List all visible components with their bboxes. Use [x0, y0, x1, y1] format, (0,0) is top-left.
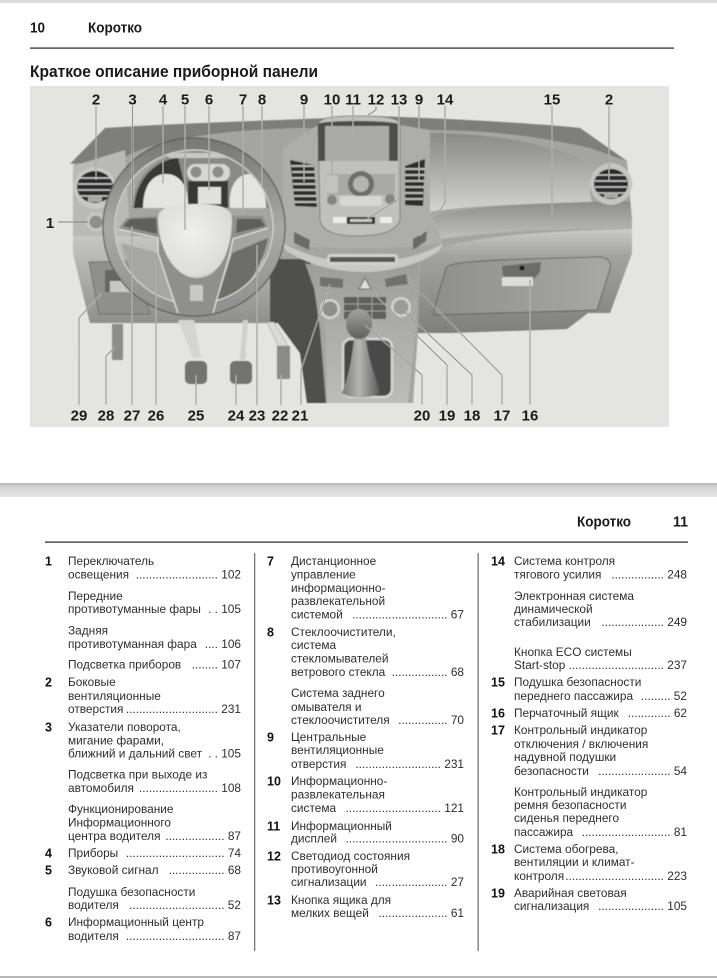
center stack surround — [283, 125, 443, 248]
text column 1 — [45, 554, 241, 943]
item 14 — [491, 554, 687, 672]
left upper dash — [73, 150, 130, 236]
small gauges — [187, 164, 230, 208]
item 13: 13 — [267, 894, 281, 908]
item 12: Светодиод состояния — [291, 849, 410, 863]
item 12: противоугонной — [291, 862, 378, 876]
item 1: Задняя — [68, 624, 108, 638]
item 12: сигнализации — [291, 875, 367, 889]
item 7: ............................. 67 — [352, 608, 464, 622]
item 3: автомобиля — [68, 781, 134, 795]
callout numbers bottom row: 16 — [522, 408, 538, 424]
item 2: отверстия — [68, 702, 123, 716]
item 10 — [267, 774, 464, 815]
callout numbers top row: 9 — [415, 92, 423, 108]
item 16: ............. 62 — [628, 706, 687, 720]
item 8: ветрового стекла — [291, 665, 386, 679]
item 7: Дистанционное — [291, 554, 377, 568]
item 12: ...................... 27 — [375, 875, 464, 889]
text column 2 — [267, 554, 464, 920]
item 16 — [491, 706, 687, 720]
knee panel — [89, 261, 150, 314]
radio controls — [327, 171, 395, 224]
item 10: развлекательная — [291, 788, 385, 802]
item 2: Боковые — [68, 675, 116, 689]
item 3: 3 — [45, 720, 52, 734]
item 5: ............................. 52 — [129, 898, 241, 912]
item 17: ........................... 81 — [582, 825, 687, 839]
item 4: Приборы — [68, 846, 118, 860]
item 9: вентиляционные — [291, 743, 384, 757]
item 14: 14 — [491, 554, 505, 568]
callout numbers top row: 7 — [239, 92, 247, 108]
item 1: ........ 107 — [192, 658, 241, 672]
right air vent — [590, 163, 632, 205]
left spoke controls — [123, 218, 157, 234]
driver side dark footwell — [270, 259, 326, 403]
callout numbers bottom row: 21 — [292, 408, 308, 424]
item 3: мигание фарами, — [68, 734, 164, 748]
callout numbers bottom row: 20 — [414, 408, 430, 424]
callout numbers top row: 14 — [437, 92, 454, 108]
item 12: 12 — [267, 850, 281, 864]
callout numbers bottom row: 25 — [188, 408, 204, 424]
item 19: Аварийная световая — [514, 886, 627, 900]
item 8: Стеклоочистители, — [291, 625, 396, 639]
item 9: 9 — [267, 730, 274, 744]
item 14: ................ 248 — [611, 568, 687, 582]
page header right: Коротко — [577, 514, 631, 530]
item 15: 15 — [491, 676, 505, 690]
left lower dash — [73, 236, 280, 323]
item 6: водителя — [68, 929, 119, 943]
text column 3 — [491, 554, 687, 913]
item 11: 11 — [267, 820, 280, 834]
gear boot — [342, 338, 380, 398]
item 18 — [491, 842, 687, 883]
console buttons — [320, 274, 408, 289]
item 1: противотуманная фара — [68, 637, 197, 651]
item 8: ............... 70 — [398, 713, 464, 727]
item 5: Звуковой сигнал — [68, 863, 159, 877]
item 7: развлекательной — [291, 594, 385, 608]
page break band — [0, 483, 717, 497]
item 6 — [45, 915, 241, 943]
item 6: 6 — [45, 916, 52, 930]
steering wheel ring — [109, 144, 279, 310]
item 1: ......................... 102 — [136, 568, 241, 582]
right middle dash strip — [420, 201, 632, 243]
callout numbers bottom row: 28 — [98, 408, 114, 424]
callout numbers top row: 13 — [391, 92, 407, 108]
parking lever — [112, 324, 123, 360]
item 3: Подсветка при выходе из — [68, 768, 207, 782]
callout leader halo — [79, 108, 609, 405]
item 9 — [267, 730, 464, 771]
item 3: Информационного — [68, 816, 171, 830]
item 1: освещения — [68, 568, 129, 582]
item 7: управление — [291, 568, 356, 582]
item 17: надувной подушки — [514, 750, 616, 764]
item 3: ближний и дальний свет — [68, 746, 203, 760]
callout numbers top row: 11 — [345, 92, 361, 108]
cluster dark shadow — [134, 158, 190, 208]
steering wheel spokes — [118, 216, 268, 313]
steering wheel ring outline — [109, 144, 279, 310]
callout numbers top row: 9 — [300, 92, 308, 108]
callout numbers bottom row: 18 — [464, 408, 480, 424]
callout numbers bottom row: 27 — [124, 408, 140, 424]
center console — [305, 256, 418, 403]
item 1: Передние — [68, 589, 123, 603]
item 2: вентиляционные — [68, 689, 161, 703]
lower center trim — [283, 243, 443, 272]
bottom page edge line — [0, 976, 717, 978]
item 5: Подушка безопасности — [68, 885, 195, 899]
item 3: Указатели поворота, — [68, 720, 181, 734]
item 12 — [267, 849, 464, 889]
item 10: ............................. 121 — [346, 801, 464, 815]
item 17: отключения / включения — [514, 737, 648, 751]
page header left — [30, 20, 674, 49]
callout numbers bottom row: 24 — [228, 408, 245, 424]
left gauge — [143, 174, 188, 208]
item 11: Информационный — [291, 819, 392, 833]
driver information display — [198, 187, 221, 204]
item 17 — [491, 723, 687, 839]
item 14: Кнопка ECO системы — [514, 645, 632, 659]
column dividers — [254, 553, 479, 951]
item 19: 19 — [491, 886, 505, 900]
item 8: стекломывателей — [291, 652, 388, 666]
item 3 — [45, 720, 241, 843]
horn pad — [158, 204, 232, 278]
item 2: 2 — [45, 676, 52, 690]
item 8: омывателя и — [291, 700, 361, 714]
steering wheel ring highlight — [115, 150, 273, 304]
panel: dashboard illustration — [30, 86, 669, 427]
item 10: 10 — [267, 774, 281, 788]
center vent left — [290, 160, 317, 207]
light switch — [86, 212, 106, 232]
item 16: 16 — [491, 706, 505, 720]
callout numbers top row: 5 — [181, 92, 189, 108]
item 7 — [267, 554, 464, 622]
item 7: информационно- — [291, 581, 385, 595]
callout numbers top row: 4 — [159, 92, 168, 108]
item 13: ..................... 61 — [378, 906, 464, 920]
screen bezel — [318, 121, 398, 161]
center stack — [318, 116, 400, 236]
item 1: Подсветка приборов — [68, 658, 181, 672]
item 15 — [491, 675, 687, 703]
callout numbers bottom row: 17 — [494, 408, 510, 424]
item 13 — [267, 893, 464, 920]
item 17: Контрольный индикатор — [514, 785, 648, 799]
callout numbers top row: 12 — [368, 92, 384, 108]
callout numbers bottom row: 22 — [272, 408, 288, 424]
callout numbers top row: 3 — [128, 92, 137, 108]
item 19 — [491, 886, 687, 913]
item 14: тягового усилия — [514, 568, 601, 582]
callout numbers top row: 1 — [46, 215, 54, 232]
item 17: 17 — [491, 724, 505, 738]
right glove section — [418, 229, 632, 333]
callout numbers top row: 8 — [258, 92, 266, 108]
callout numbers top row: 10 — [324, 92, 340, 108]
center vent right — [405, 159, 425, 206]
item 9: .......................... 231 — [355, 757, 464, 771]
item 1 — [45, 554, 241, 672]
gear boot surround — [343, 339, 392, 397]
lower spoke badge — [190, 285, 203, 301]
item 14: стабилизации — [514, 615, 591, 629]
right gauge — [230, 174, 266, 208]
item 14: Система контроля — [514, 554, 615, 568]
item 10: Информационно- — [291, 774, 387, 788]
item 17: ремня безопасности — [514, 798, 626, 812]
spoke piping — [118, 228, 268, 313]
accelerator pedal — [267, 322, 290, 379]
storage slot — [327, 254, 398, 265]
right spoke controls — [236, 219, 265, 233]
item 1: Переключатель — [68, 554, 154, 568]
callout numbers top row — [46, 92, 613, 232]
item 3: центра водителя — [68, 829, 160, 843]
item 18: 18 — [491, 842, 505, 856]
item 17: пассажира — [514, 825, 574, 839]
page header right — [45, 514, 688, 543]
visor bar — [168, 153, 230, 158]
item 15: переднего пассажира — [514, 689, 633, 703]
item 5: ................. 68 — [169, 863, 241, 877]
glove box handle — [502, 262, 541, 286]
item 8 — [267, 625, 464, 727]
item 8: стеклоочистителя — [291, 713, 390, 727]
item 3: ........................ 108 — [139, 781, 241, 795]
item 9: Центральные — [291, 730, 367, 744]
page header left: Коротко — [88, 20, 142, 36]
inside wheel right lower area — [213, 238, 268, 313]
item 14: ................... 249 — [601, 615, 687, 629]
item 9: отверстия — [291, 757, 346, 771]
item 17: ...................... 54 — [598, 764, 687, 778]
instrument cluster backing — [132, 151, 270, 208]
item 7: системой — [291, 608, 343, 622]
callout numbers bottom row: 26 — [148, 408, 164, 424]
item 14: ............................. 237 — [569, 658, 687, 672]
item 10: система — [291, 801, 336, 815]
callout numbers top row: 6 — [205, 92, 213, 108]
item 1: противотуманные фары — [68, 602, 201, 616]
clutch pedal — [178, 320, 207, 384]
item 18: вентиляции и климат- — [514, 855, 635, 869]
item 4 — [45, 846, 241, 860]
gear knob — [346, 309, 372, 339]
left air vent — [74, 167, 116, 209]
callout numbers bottom row: 19 — [439, 408, 455, 424]
dashboard body — [73, 116, 632, 403]
item 7: 7 — [267, 554, 274, 568]
item 11: дисплей — [291, 832, 337, 846]
top page edge band — [0, 0, 717, 3]
callout numbers bottom row: 23 — [249, 408, 265, 424]
item 14: Start-stop — [514, 658, 566, 672]
item 8: 8 — [267, 626, 274, 640]
item 15: Подушка безопасности — [514, 675, 641, 689]
item 16: Перчаточный ящик — [514, 706, 619, 720]
dashboard drawing — [70, 116, 632, 403]
callout numbers top row: 2 — [605, 92, 613, 108]
item 17: безопасности — [514, 764, 589, 778]
page header right: 11 — [673, 514, 688, 530]
item 14: динамической — [514, 602, 593, 616]
brake pedal — [230, 320, 252, 384]
item 3: .................. 87 — [165, 829, 241, 843]
glove box lid — [434, 257, 610, 315]
item 6: Информационный центр — [68, 915, 204, 929]
console knobs — [320, 297, 411, 319]
trim vents — [294, 231, 427, 250]
item 18: контроля — [514, 869, 564, 883]
item 5: водителя — [68, 898, 119, 912]
callout numbers bottom row: 29 — [71, 408, 87, 424]
item 8: Система заднего — [291, 686, 385, 700]
item 19: .................... 105 — [598, 899, 687, 913]
item 3: Функционирование — [68, 802, 174, 816]
climate buttons — [344, 297, 386, 319]
inside wheel lower area — [121, 243, 178, 313]
item 18: .............................. 223 — [565, 869, 687, 883]
item 18: Система обогрева, — [514, 842, 618, 856]
title: Краткое описание приборной панели — [30, 62, 318, 81]
item 8: система — [291, 638, 336, 652]
item 14: Электронная система — [514, 589, 634, 603]
item 2: ............................ 231 — [126, 702, 241, 716]
callout numbers top row: 2 — [92, 92, 100, 108]
item 17: Контрольный индикатор — [514, 723, 648, 737]
item 19: сигнализация — [514, 899, 589, 913]
item 3: . . 105 — [208, 746, 241, 760]
item 6: .............................. 87 — [126, 929, 241, 943]
item 13: Кнопка ящика для — [291, 893, 391, 907]
item 1: 1 — [45, 554, 52, 568]
callout leader lines — [58, 106, 609, 405]
item 4: 4 — [45, 846, 52, 860]
page header left: 10 — [30, 20, 45, 36]
callout numbers top row: 15 — [544, 92, 560, 108]
item 1: . . 105 — [208, 602, 241, 616]
item 11 — [267, 819, 464, 846]
upper dash top strip — [70, 116, 627, 164]
item 1: .... 106 — [205, 637, 241, 651]
item 8: ................. 68 — [392, 665, 464, 679]
item 15: ......... 52 — [641, 689, 687, 703]
item 4: .............................. 74 — [126, 846, 241, 860]
item 5 — [45, 863, 241, 912]
item 2 — [45, 675, 241, 716]
item 17: сиденья переднего — [514, 811, 619, 825]
callout numbers bottom row — [71, 408, 538, 424]
information display — [325, 126, 389, 161]
item 11: ............................... 90 — [346, 832, 464, 846]
item 5: 5 — [45, 864, 52, 878]
item 13: мелких вещей — [291, 906, 369, 920]
right upper dash surface — [428, 133, 600, 212]
